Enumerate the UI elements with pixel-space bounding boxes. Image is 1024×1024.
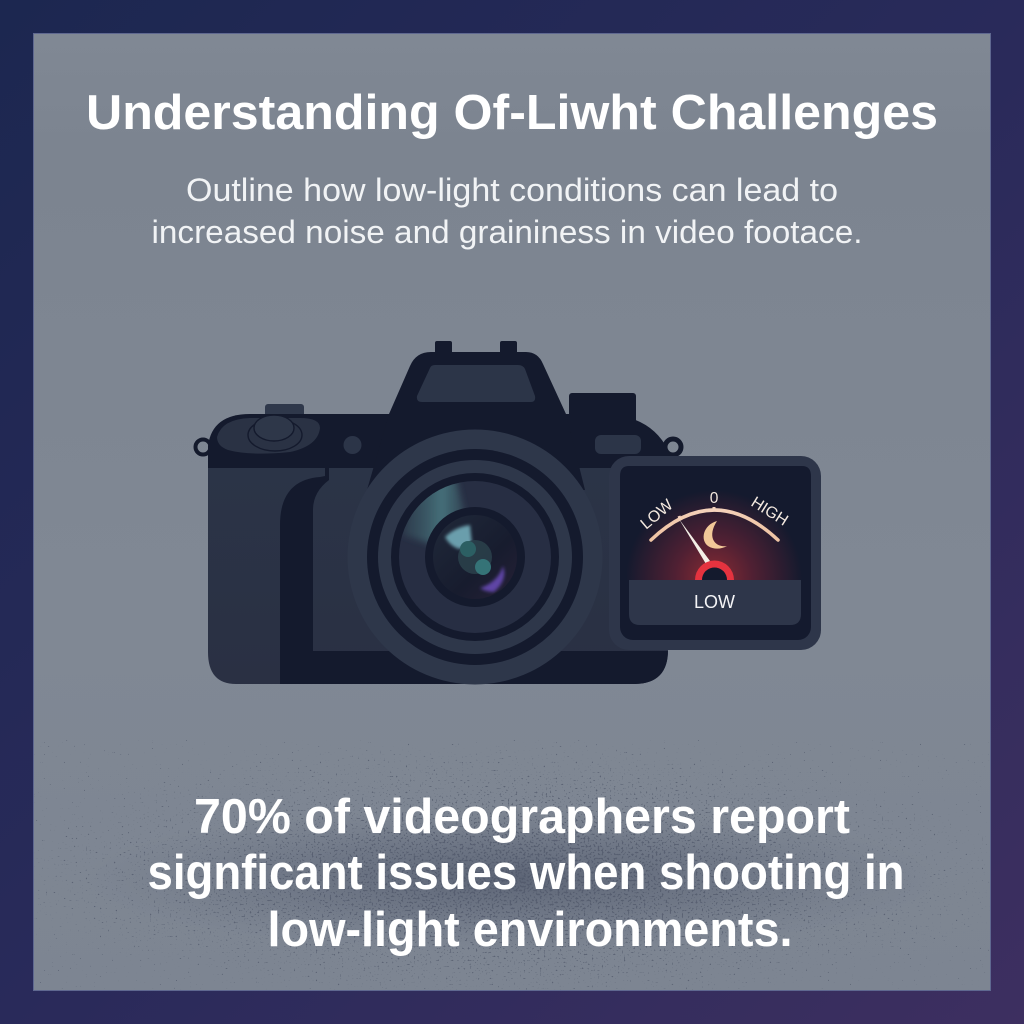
- gauge tick marks: [679, 507, 714, 519]
- camera grip shadow: [280, 468, 668, 684]
- title: Understanding Of-Liwht Challenges: [86, 86, 938, 140]
- gauge label zero: 0: [710, 490, 719, 507]
- gauge pivot centre: [702, 568, 727, 580]
- gauge arc: [651, 510, 778, 540]
- screen inner: [620, 466, 811, 640]
- camera shutter button: [265, 404, 304, 420]
- readout label: LOW: [694, 592, 735, 612]
- gauge label high: HIGH: [748, 494, 791, 530]
- lens: [367, 430, 584, 684]
- camera prism: [367, 352, 585, 490]
- icon: camera: [196, 341, 681, 684]
- gauge pivot: [695, 560, 734, 580]
- mode dial: [217, 415, 320, 454]
- small body button: [344, 436, 362, 454]
- statistic callout: 70% of videographers report: [194, 790, 850, 844]
- right body button: [595, 435, 641, 454]
- statistic callout: signficant issues when shooting in: [148, 846, 904, 900]
- camera right block: [569, 393, 636, 433]
- inner lens highlights: [445, 525, 504, 592]
- lens teal reflection: [404, 483, 465, 545]
- readout bar: [629, 580, 801, 625]
- statistic callout: low-light environments.: [268, 903, 792, 957]
- viewfinder window: [417, 365, 535, 402]
- statistic callout: [148, 790, 904, 957]
- gauge needle: [679, 519, 710, 564]
- camera strap lug right: [665, 439, 681, 455]
- noise and grain texture: [12, 740, 1012, 1010]
- camera body lower: [208, 468, 668, 684]
- icon: crescent moon: [704, 521, 727, 549]
- panel: exposure meter screen: [609, 456, 821, 650]
- subtitle text block: Outline how low-light conditions can lead to: [186, 172, 838, 208]
- hot shoe right: [500, 341, 517, 355]
- hot shoe left: [435, 341, 452, 355]
- subtitle text block: [152, 172, 862, 250]
- camera top plate: [208, 414, 668, 468]
- subtitle text block: increased noise and graininess in video footace.: [152, 214, 862, 250]
- camera strap lug left: [196, 440, 210, 454]
- screen outer frame: [609, 456, 821, 650]
- gauge label low: LOW: [638, 496, 677, 533]
- screen red glow: [620, 466, 811, 580]
